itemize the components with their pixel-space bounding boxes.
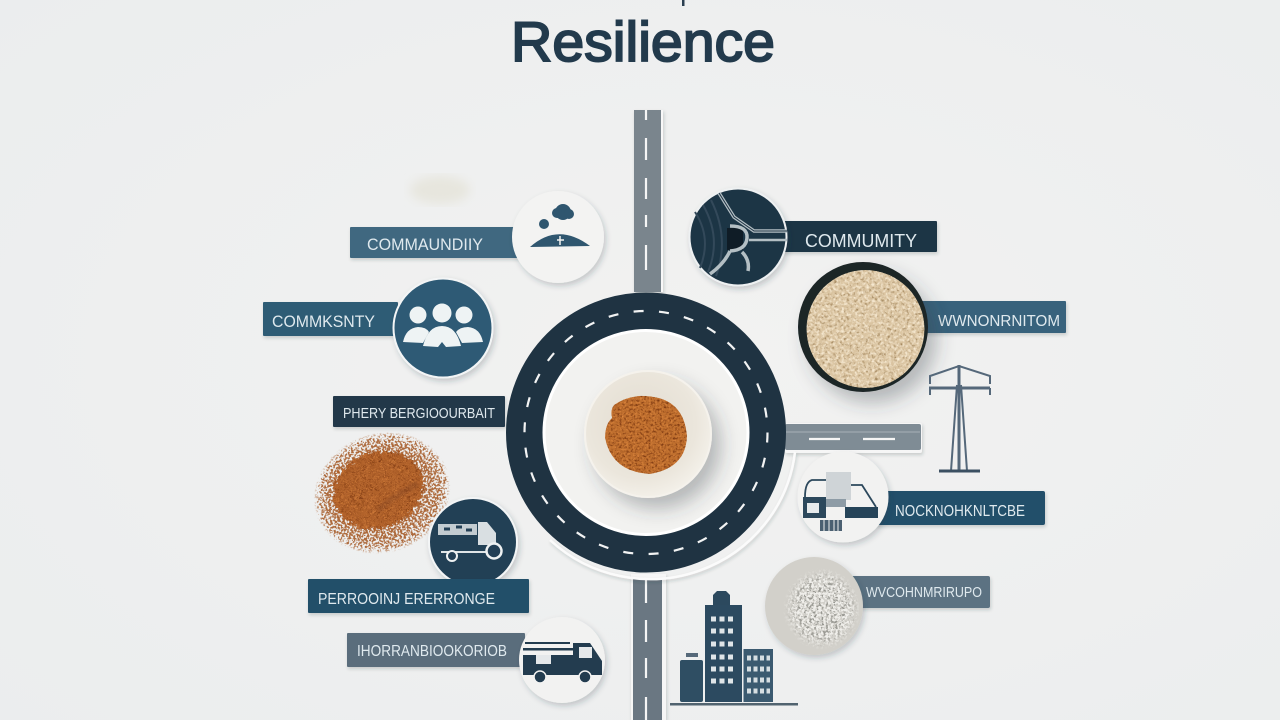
label (308, 579, 529, 613)
title: Resilience (511, 10, 775, 73)
icon: three people (394, 278, 492, 378)
label (875, 491, 1045, 525)
dark curved lanes (695, 200, 722, 276)
label: WWNONRNITOM (938, 313, 1060, 330)
icon: gravel disc (765, 557, 863, 655)
icon: van (519, 617, 605, 703)
right block (744, 649, 773, 702)
item: gravel (765, 557, 990, 655)
label: PERROOINJ ERERRONGE (318, 591, 495, 608)
road ring (524, 311, 768, 554)
icon: landscape with trees (512, 191, 604, 283)
base line (670, 703, 798, 706)
label: IHORRANBIOOKORIOB (357, 643, 507, 660)
outer white edge (550, 452, 795, 579)
label (350, 227, 520, 258)
label: dark middle left (333, 396, 505, 427)
central tower (705, 591, 742, 702)
inner plate (544, 330, 748, 534)
central bowl of spice (585, 371, 711, 497)
lane dashes (524, 311, 768, 554)
label (920, 301, 1066, 333)
central roundabout (524, 311, 795, 579)
item: truck (308, 498, 529, 613)
scattered grains (306, 423, 458, 563)
bowl (585, 371, 711, 497)
pile core (322, 439, 434, 541)
spice (605, 396, 687, 474)
spice pile (306, 423, 458, 563)
label (775, 221, 937, 252)
item: machinery (798, 452, 1045, 542)
icon: truck (429, 498, 517, 586)
icon: black bowl (798, 262, 928, 392)
item: van (347, 617, 605, 703)
road: bottom vertical (631, 574, 666, 720)
dark streak (378, 484, 418, 510)
label (850, 576, 990, 608)
icon: power pylon (929, 365, 990, 471)
item: top left community (350, 191, 604, 283)
label: WVCOHNMRIRUPO (866, 584, 982, 601)
item: top right road junction (690, 188, 937, 286)
faint speck: top left (410, 176, 470, 204)
label: NOCKNOHKNLTCBE (895, 503, 1025, 520)
label (347, 633, 525, 667)
icon: road junction (690, 188, 787, 286)
label: COMMUMITY (805, 231, 917, 251)
left block (680, 653, 703, 702)
label: COMMAUNDIIY (367, 235, 483, 254)
label: dark middle left: PHERY BERGIOOURBAIT (343, 405, 495, 422)
label (263, 302, 398, 336)
item: community people (263, 278, 492, 378)
light road network (710, 193, 787, 274)
icon: city buildings (670, 591, 798, 706)
road: top vertical (634, 110, 663, 292)
icon: construction machine (798, 452, 888, 542)
road: right horizontal (785, 423, 922, 453)
label: COMMKSNTY (272, 312, 375, 331)
item: bowl of sand (798, 262, 1066, 392)
